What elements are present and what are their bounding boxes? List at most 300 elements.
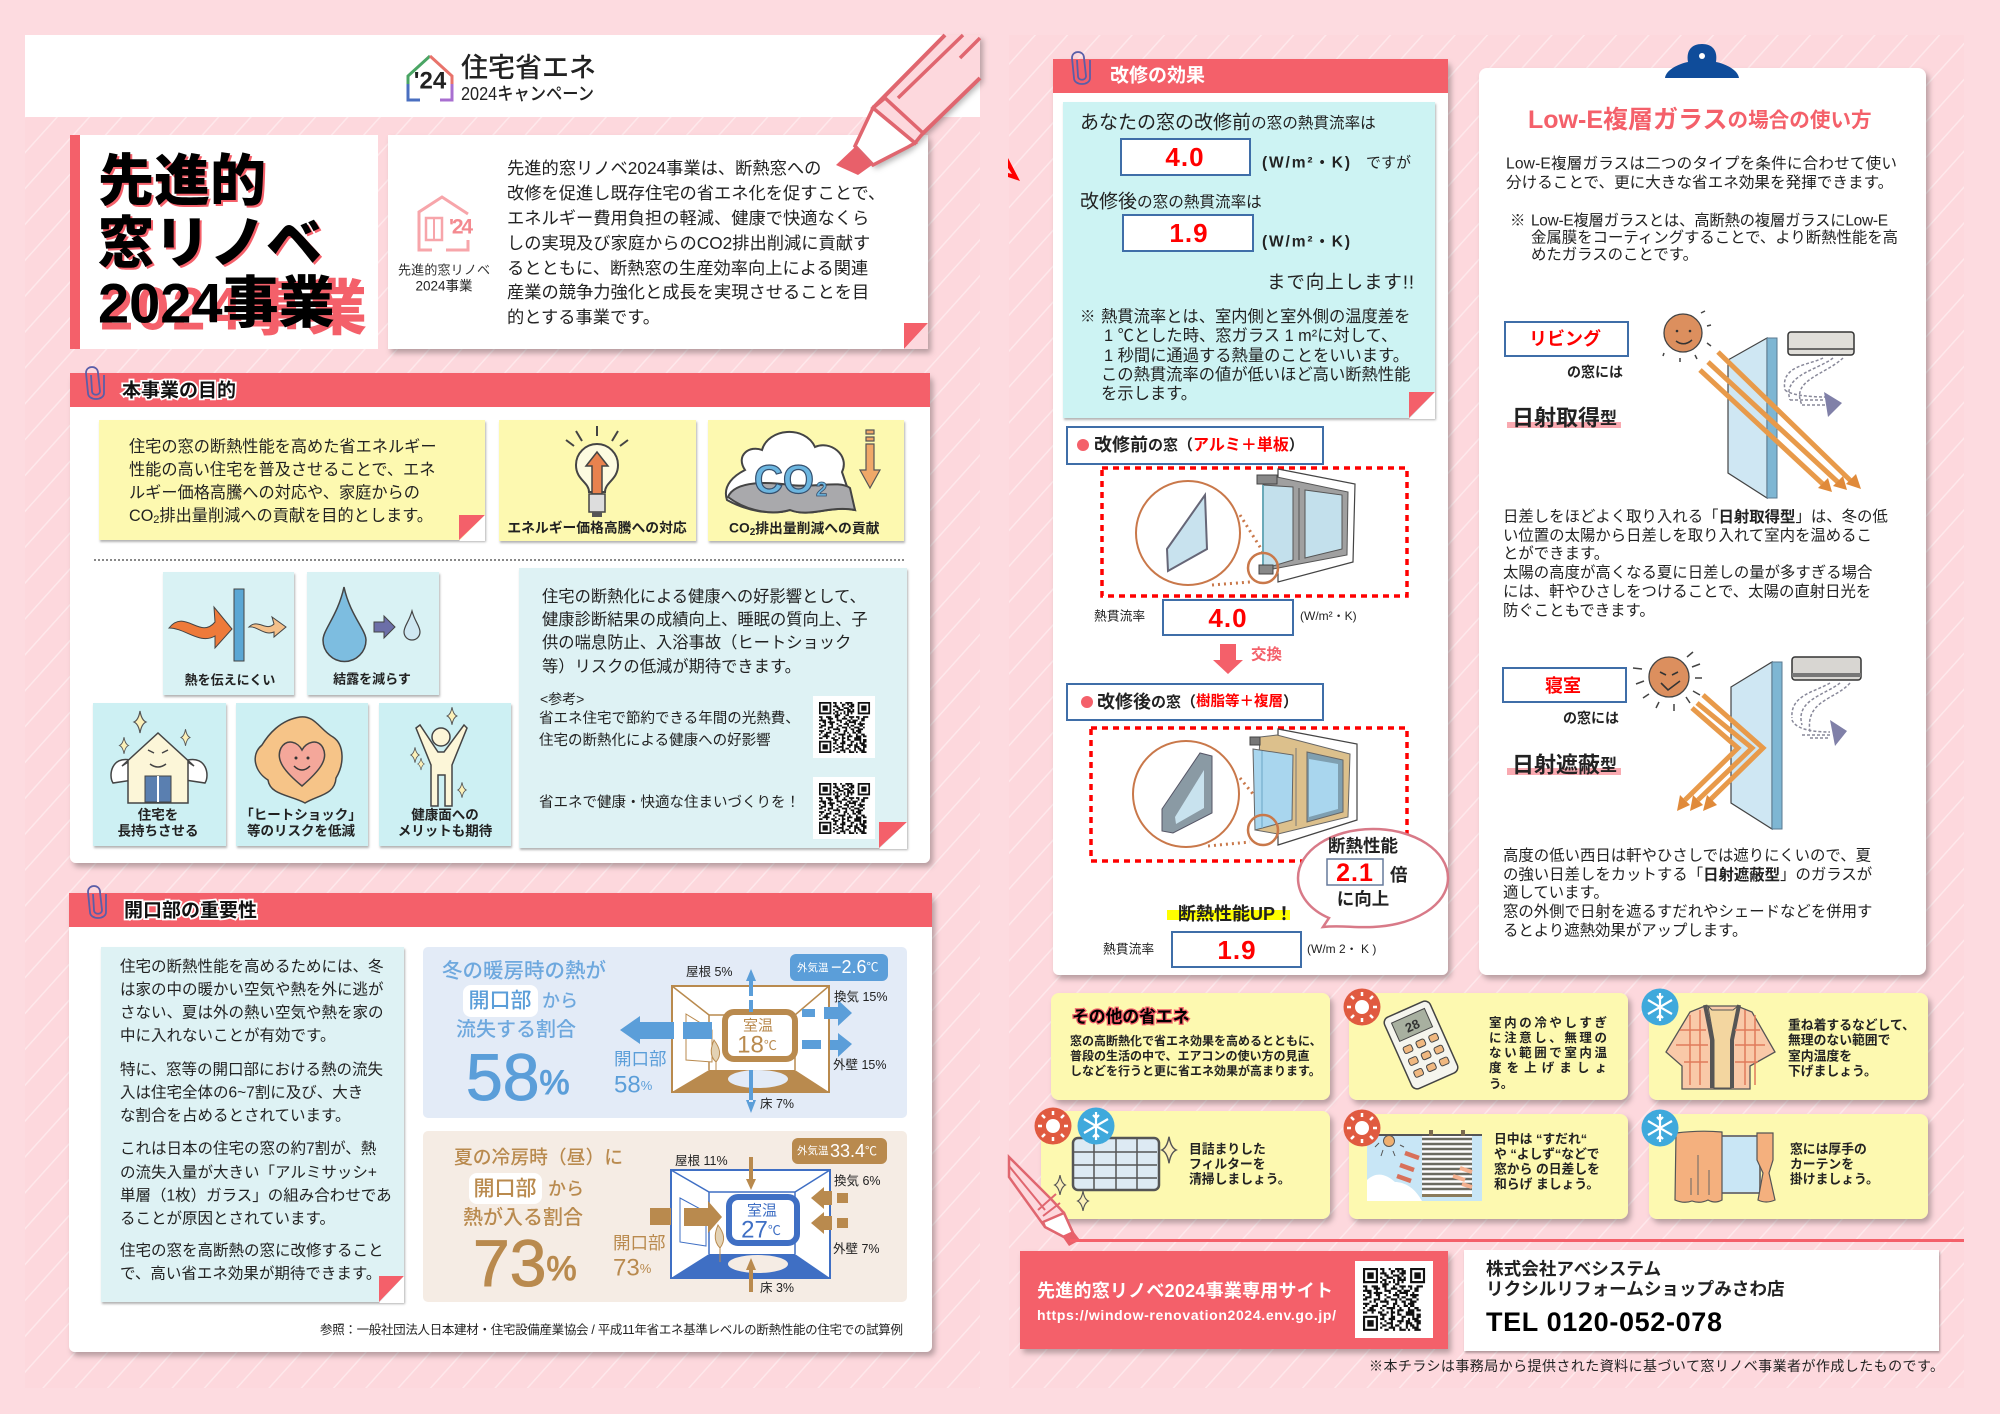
- tile text: しなどを行うと更に省エネ効果が高まります。: [1070, 1063, 1321, 1078]
- before U-value: [1094, 600, 1357, 635]
- tile label: [240, 808, 362, 838]
- arrows: [650, 1157, 848, 1292]
- room label: living: リビング: [1529, 328, 1601, 349]
- tile text: [1489, 1015, 1607, 1091]
- winter labels: 外壁 15%: [833, 1058, 886, 1072]
- unit: (W/m²・K): [1262, 234, 1350, 250]
- solar gain description: 太陽の高度が高くなる夏に日差しの量が多すぎる場合: [1503, 564, 1872, 582]
- blue note text: 住宅の断熱性能を高めるためには、冬: [120, 958, 384, 976]
- sun: [1663, 311, 1711, 362]
- tile text: 日中は “すだれ“: [1494, 1132, 1587, 1146]
- blue note text: 住宅の窓を高断熱の窓に改修すること: [120, 1242, 384, 1260]
- icon: heat against glass: [169, 589, 286, 661]
- explanation note: 1 秒間に通過する熱量のことをいいます。: [1104, 347, 1409, 365]
- title text: 2024事業: [98, 272, 335, 334]
- tile text: [1494, 1132, 1600, 1192]
- tile text: 普段の生活の中で、エアコンの使い方の見直: [1070, 1048, 1310, 1063]
- icon: hanten jacket: [1666, 1005, 1775, 1089]
- blue note: U-value explanation: あなたの窓の改修前の窓の熱貫流率は: [1080, 112, 1376, 134]
- tile text: 窓から の日差しを: [1494, 1162, 1600, 1176]
- intro text: [1506, 154, 1897, 192]
- summer labels: [675, 1154, 881, 1295]
- title text: [98, 150, 367, 342]
- winter heading: から: [542, 991, 578, 1011]
- intro card: [388, 135, 928, 349]
- tile: heat shock risk: [236, 703, 368, 846]
- winter labels: 屋根 5%: [686, 965, 733, 979]
- intro text: 産業の競争力強化と成長を実現させることを目: [507, 282, 869, 302]
- icon: remote control: 28: [1403, 1016, 1422, 1036]
- solar shading description: 高度の低い西日は軒やひさしでは遮りにくいので、夏: [1503, 846, 1871, 864]
- panel: summer heat gain: [423, 1131, 907, 1302]
- tile text: [1070, 1033, 1322, 1078]
- tile text: カーテンを: [1790, 1156, 1854, 1172]
- winter heading: 冬の暖房時の熱が: [442, 960, 606, 982]
- intro text: しの実現及び家庭からのCO2排出削減に貢献す: [507, 233, 870, 253]
- yellow note: 住宅の窓の断熱性能を高めた省エネルギー: [129, 438, 437, 456]
- summer room diagram: [650, 1157, 848, 1292]
- reference text: 住宅の断熱化による健康への好影響: [539, 732, 771, 749]
- footnote: ※本チラシは事務局から提供された資料に基づいて窓リノベ事業者が作成したものです。: [1369, 1358, 1944, 1374]
- tile label: メリットも期待: [398, 822, 493, 838]
- tile text: 重ね着するなどして、: [1788, 1018, 1915, 1032]
- room label: bedroom: の窓には: [1563, 710, 1619, 726]
- exchange arrow: 交換: [1251, 646, 1283, 664]
- icon: paper clip: [88, 886, 106, 918]
- panel: renovation effect: [1053, 52, 1448, 975]
- room label: bedroom: 寝室: [1545, 676, 1581, 696]
- tile text: [1189, 1142, 1291, 1186]
- solar shading description: [1503, 846, 1872, 940]
- tile text: 無理のない範囲で: [1788, 1032, 1890, 1048]
- after U-value: 熱貫流率: [1103, 942, 1154, 956]
- section heading: 改修の効果: [1110, 64, 1205, 86]
- reference text: <参考>: [540, 691, 584, 707]
- title text: 窓リノベ: [98, 212, 322, 274]
- solar gain description: には、軒やひさしをつけることで、太陽の直射日光を: [1503, 582, 1871, 600]
- tile: CO2 reduction: [708, 420, 904, 541]
- before-window illustration: [1102, 468, 1407, 596]
- value box after: 1.9: [1169, 218, 1209, 248]
- winter opening label: 開口部: [614, 1049, 666, 1069]
- room temperature label: [729, 1197, 797, 1244]
- reference text: [539, 691, 800, 811]
- divider: [94, 559, 906, 561]
- winter heading: 流失する割合: [456, 1018, 576, 1041]
- winter heading: [442, 960, 606, 1041]
- explanation note: 熱貫流率とは、室内側と室外側の温度差を: [1101, 308, 1410, 326]
- after U-value: (W/m 2・ K ): [1307, 942, 1376, 956]
- icon: remote control: [1382, 999, 1460, 1091]
- company name: リクシルリフォームショップみさわ店: [1486, 1279, 1785, 1299]
- summer opening label: [613, 1233, 666, 1282]
- tile text: 室内温度を: [1788, 1048, 1852, 1064]
- air conditioner: [1788, 332, 1854, 355]
- blue note: health benefits: 等）リスクの低減が期待できます。: [542, 658, 801, 676]
- before U-value: 4.0: [1208, 603, 1248, 633]
- air conditioner: [1792, 657, 1861, 680]
- icon: water drops: [323, 587, 420, 662]
- title text: 窓リノベ: [100, 214, 324, 276]
- blue note text: な割合を占めるとされています。: [120, 1106, 350, 1124]
- icon: clipboard clip: [1665, 44, 1739, 78]
- summer big number: %: [546, 1250, 577, 1288]
- magnified single glass: [1136, 481, 1240, 585]
- icon: happy person: [411, 707, 467, 806]
- tile: other energy savings: [1051, 993, 1330, 1100]
- blue note text: の流失入量が大きい「アルミサッシ+: [120, 1164, 377, 1182]
- explanation note: 1 ℃とした時、窓ガラス 1 m²に対して、: [1104, 327, 1397, 345]
- outdoor temperature badge winter: [790, 954, 888, 981]
- tile text: フィルターを: [1189, 1156, 1266, 1172]
- tile heading: その他の省エネ: [1072, 1008, 1190, 1026]
- tile text: 掛けましょう。: [1790, 1172, 1879, 1186]
- blue note text: は家の中の暖かい空気や熱を外に逃が: [120, 980, 384, 998]
- panel title: Low-E複層ガラスの場合の使い方: [1528, 106, 1872, 134]
- tile: curtain tip: [1642, 1110, 1928, 1219]
- tile text: に注意し、無理の: [1489, 1030, 1607, 1045]
- before U-value: (W/m²・K): [1300, 609, 1357, 623]
- solar shading description: 窓の外側で日射を遮るすだれやシェードなどを併用す: [1503, 902, 1872, 920]
- yellow note: ルギー価格高騰への対応や、家庭からの: [129, 484, 420, 502]
- blue note text: ることが原因とされています。: [120, 1210, 335, 1228]
- Low-E explanation: ※: [1510, 212, 1525, 230]
- after U-value: [1103, 932, 1376, 967]
- illustration: solar gain window: [1663, 311, 1861, 498]
- summer labels: 床 3%: [760, 1281, 794, 1295]
- divider line: [1070, 1239, 1964, 1242]
- tile label: 結露を減らす: [333, 672, 411, 686]
- icon: air filter: [1055, 1137, 1176, 1211]
- tile label: 2: [750, 526, 756, 538]
- panel: importance of openings: [69, 886, 932, 1352]
- section header bar: [69, 893, 932, 927]
- icon: summer badge: [1344, 988, 1380, 1026]
- intro text: 的とする事業です。: [507, 307, 660, 327]
- tile text: 目詰まりした: [1189, 1142, 1266, 1156]
- icon: campaign house logo: [408, 56, 452, 100]
- intro text: るとともに、断熱窓の生産効率向上による関連: [507, 258, 868, 278]
- icon: summer badge: [1344, 1110, 1380, 1146]
- title card: [70, 135, 378, 349]
- winter big number: 58: [466, 1040, 539, 1114]
- blue note text: 中に入れないことが有効です。: [120, 1026, 335, 1044]
- window drawing: [1257, 469, 1355, 582]
- room temperature label: 18℃: [737, 1032, 777, 1058]
- icon: paper clip: [1072, 52, 1090, 84]
- site URL: https://window-renovation2024.env.go.jp/: [1037, 1307, 1336, 1323]
- pen illustration top: [836, 35, 980, 175]
- title text: 先進的: [98, 150, 266, 212]
- callout: performance 2.1x: 倍: [1390, 865, 1408, 885]
- blue note: U-value explanation: 改修後の窓の熱貫流率は: [1080, 190, 1262, 212]
- room temperature label: 室温: [743, 1018, 773, 1034]
- type heading: solar shading: 日射遮蔽型: [1512, 752, 1617, 778]
- icon: project house logo: [419, 197, 468, 250]
- blue note: U-value explanation: まで向上します!!: [1267, 272, 1414, 292]
- before U-value: 熱貫流率: [1094, 608, 1145, 624]
- project logo label line 2: 2024事業: [415, 278, 473, 294]
- tile label: エネルギー価格高騰への対応: [507, 520, 687, 536]
- room temperature label: [725, 1012, 795, 1059]
- intro text: 分けることで、更に大きな省エネ効果を発揮できます。: [1506, 174, 1893, 192]
- QR code: [813, 777, 875, 839]
- icon: paper clip: [86, 367, 104, 399]
- title text: 先進的: [100, 152, 268, 214]
- tile: poor heat conduction: [163, 572, 294, 695]
- outdoor temperature badge winter: 外気温: [797, 961, 829, 974]
- tile text: 和らげ ましょう。: [1494, 1176, 1599, 1192]
- explanation note: ※: [1080, 308, 1095, 326]
- tile text: [1788, 1018, 1915, 1078]
- section heading: 開口部の重要性: [124, 900, 257, 922]
- tile: filter cleaning tip: [1034, 1108, 1330, 1219]
- winter opening label: [614, 1049, 666, 1098]
- icon: summer badge: [1034, 1108, 1072, 1144]
- intro text: [507, 158, 885, 327]
- value box before: 4.0: [1165, 142, 1205, 172]
- yellow note: [99, 420, 485, 541]
- tile text: 清掃しましょう。: [1189, 1172, 1291, 1186]
- icon: smiling heart: [255, 717, 342, 803]
- tile label: 住宅を: [138, 806, 178, 822]
- tile: layered clothing tip: [1642, 988, 1928, 1100]
- room label: bedroom: [1503, 668, 1626, 726]
- winter labels: 換気 15%: [834, 989, 888, 1004]
- tile: thermostat tip: [1344, 988, 1628, 1100]
- summer opening label: 開口部: [613, 1233, 666, 1253]
- reference text: 省エネ住宅で節約できる年間の光熱費、: [539, 710, 800, 727]
- QR code: [1355, 1261, 1433, 1338]
- winter big number: %: [539, 1064, 570, 1102]
- panel: purpose of the project: [70, 367, 930, 863]
- blue note text: [101, 947, 404, 1303]
- logo title: 住宅省エネ: [461, 53, 596, 83]
- tile text: 窓には厚手の: [1790, 1142, 1867, 1156]
- solar shading description: の強い日差しをカットする「日射遮蔽型」のガラスが: [1503, 866, 1872, 884]
- icon: CO2 cloud: CO: [754, 458, 814, 502]
- contact card: [1464, 1250, 1939, 1351]
- summer heading: 夏の冷房時（昼）に: [454, 1146, 623, 1168]
- logo subtitle: 2024キャンペーン: [461, 84, 594, 104]
- summer heading: 開口部: [474, 1178, 536, 1200]
- panel: how to use Low-E glass: [1479, 44, 1926, 975]
- tile: less condensation: [307, 572, 439, 695]
- tile: health merits: [379, 703, 511, 846]
- winter heading: 開口部: [468, 990, 532, 1012]
- magnified double glass: [1133, 741, 1239, 847]
- blue note: health benefits: 供の喘息防止、入浴事故（ヒートショック: [542, 634, 851, 652]
- summer heading: から: [548, 1179, 584, 1199]
- room label: living: [1505, 322, 1628, 380]
- summer labels: 外壁 7%: [833, 1242, 880, 1256]
- tile label: 排出量削減への貢献: [755, 520, 880, 536]
- icon: down arrow: [860, 430, 880, 488]
- banner: dedicated website: [1020, 1251, 1448, 1349]
- tile label: 健康面への: [411, 806, 479, 822]
- Low-E explanation: [1510, 212, 1898, 264]
- illustration: solar shading window: [1633, 652, 1861, 829]
- solar rays: [1685, 695, 1763, 800]
- unit: (W/m²・K): [1262, 154, 1350, 172]
- outdoor temperature badge summer: [792, 1138, 887, 1164]
- value box before: [1121, 139, 1250, 175]
- explanation note: を示します。: [1101, 385, 1197, 403]
- room temperature label: 室温: [747, 1202, 777, 1220]
- intro text: 先進的窓リノベ2024事業は、断熱窓への: [507, 158, 821, 178]
- QR code: [813, 696, 875, 758]
- summer opening label: 73%: [613, 1254, 652, 1282]
- logo mark text: '24: [414, 68, 447, 94]
- telephone: TEL 0120-052-078: [1486, 1307, 1722, 1337]
- panel: winter heat loss: [423, 947, 907, 1118]
- outdoor temperature badge summer: 33.4℃: [830, 1141, 877, 1161]
- tile text: や “よしず“などで: [1494, 1146, 1599, 1162]
- section heading: 本事業の目的: [122, 380, 236, 402]
- winter room diagram: [620, 969, 852, 1113]
- explanation note: [1080, 308, 1410, 403]
- tile: shade tip: [1344, 1110, 1628, 1219]
- project logo label: 先進的窓リノベ: [398, 262, 490, 278]
- icon mark text: '24: [449, 216, 473, 238]
- intro text: 改修を促進し既存住宅の省エネ化を促すことで、: [507, 183, 885, 203]
- tile label: 「ヒートショック」: [240, 808, 362, 822]
- tile: energy price: [499, 420, 696, 541]
- callout: performance 2.1x: に向上: [1337, 889, 1389, 909]
- outdoor temperature badge summer: 外気温: [797, 1144, 829, 1157]
- solar gain description: [1503, 508, 1888, 620]
- yellow note: 2: [153, 514, 159, 526]
- header band with campaign logo: [25, 35, 980, 117]
- blue note text: さない、夏は外の熱い空気や熱を家の: [120, 1004, 384, 1022]
- icon: strong house: [111, 711, 207, 803]
- outdoor temperature badge winter: −2.6℃: [831, 957, 879, 977]
- solar gain description: 日差しをほどよく取り入れる「日射取得型」は、冬の低: [1503, 508, 1888, 526]
- summer heading: [454, 1146, 623, 1229]
- blue note: U-value explanation: ですが: [1366, 154, 1411, 172]
- yellow note: 排出量削減への貢献を目的とします。: [159, 507, 433, 525]
- after U-value: 1.9: [1217, 935, 1257, 965]
- room label: living: の窓には: [1567, 364, 1623, 380]
- tile label: [398, 806, 493, 838]
- callout: performance 2.1x: 断熱性能: [1328, 836, 1398, 856]
- solar gain description: 防ぐこともできます。: [1503, 602, 1655, 620]
- room temperature label: 27℃: [741, 1216, 781, 1244]
- intro text: エネルギー費用負担の軽減、健康で快適なくら: [507, 208, 869, 228]
- yellow note: CO: [129, 507, 153, 525]
- blue note: health benefits: [519, 568, 907, 849]
- tile text: 窓の高断熱化で省エネ効果を高めるとともに、: [1070, 1033, 1322, 1048]
- tile text: [1790, 1142, 1879, 1186]
- sun: [1633, 652, 1702, 711]
- tile label: 長持ちさせる: [118, 822, 198, 838]
- explanation note: この熱貫流率の値が低いほど高い断熱性能: [1101, 366, 1410, 384]
- pen illustration bottom: [1009, 1157, 1080, 1246]
- tile label: 熱を伝えにくい: [185, 672, 275, 688]
- tile text: ない範囲で室内温: [1489, 1045, 1607, 1060]
- summer big number: 73: [473, 1226, 546, 1300]
- company name: 株式会社アベシステム: [1486, 1259, 1661, 1279]
- before-window heading: 改修前の窓（アルミ＋単板）: [1094, 434, 1304, 455]
- summer labels: 屋根 11%: [675, 1154, 728, 1168]
- winter labels: [686, 965, 888, 1111]
- intro text: Low-E複層ガラスは二つのタイプを条件に合わせて使い: [1506, 154, 1897, 172]
- winter labels: 床 7%: [760, 1097, 794, 1111]
- icon: light bulb: [566, 426, 628, 517]
- tile label: 等のリスクを低減: [247, 822, 355, 838]
- solar gain description: とができます。: [1503, 544, 1609, 562]
- solar gain description: い位置の太陽から日差しを取り入れて室内を温めるこ: [1503, 526, 1872, 544]
- summer heading: 熱が入る割合: [463, 1206, 583, 1229]
- callout: performance 2.1x: 2.1: [1336, 859, 1374, 887]
- callout: performance 2.1x: [1298, 829, 1448, 927]
- before-window heading: [1067, 427, 1323, 464]
- arrows: [620, 969, 852, 1113]
- reference text: 省エネで健康・快適な住まいづくりを！: [539, 794, 800, 811]
- summer labels: 換気 6%: [834, 1173, 881, 1188]
- performance up label: 断熱性能UP！: [1178, 904, 1293, 924]
- blue note: health benefits: 健康診断結果の成績向上、睡眠の質向上、子: [542, 611, 868, 629]
- tile text: 室内の冷やしすぎ: [1489, 1015, 1607, 1030]
- small red mark: [1008, 158, 1020, 181]
- Low-E explanation: 金属膜をコーティングすることで、より断熱性能を高: [1531, 228, 1898, 246]
- after-window heading: [1067, 684, 1323, 720]
- section header bar: [70, 373, 930, 407]
- blue note: health benefits: 住宅の断熱化による健康への好影響として、: [542, 588, 866, 606]
- company name: [1486, 1259, 1785, 1299]
- blue note text: 特に、窓等の開口部における熱の流失: [120, 1060, 384, 1078]
- solar shading description: るとより遮熱効果がアップします。: [1503, 922, 1747, 940]
- type heading: solar gain: 日射取得型: [1512, 406, 1617, 430]
- icon: bamboo blind: [1367, 1130, 1482, 1201]
- window drawing: [1250, 729, 1357, 845]
- section header bar: [1053, 59, 1448, 93]
- solar rays: [1700, 352, 1854, 487]
- winter opening label: 58%: [614, 1072, 653, 1098]
- blue note text: で、高い省エネ効果が期待できます。: [120, 1264, 381, 1282]
- tile text: 度を上げましょ: [1489, 1060, 1607, 1075]
- tile text: 下げましょう。: [1788, 1064, 1877, 1078]
- after-window illustration: [1091, 728, 1407, 861]
- solar shading description: 適しています。: [1503, 884, 1609, 902]
- site name: 先進的窓リノベ2024事業専用サイト: [1037, 1281, 1333, 1301]
- blue note text: これは日本の住宅の窓の約7割が、熱: [120, 1140, 377, 1158]
- tile: longer life house: [93, 703, 226, 846]
- icon: winter badge: [1078, 1108, 1114, 1144]
- left page striped background: [25, 35, 980, 1388]
- title text: 2024事業: [100, 276, 367, 342]
- icon: CO2 cloud: [726, 432, 855, 513]
- icon: CO2 cloud: 2: [816, 479, 827, 501]
- tile label: [118, 806, 198, 838]
- tile label: CO: [729, 520, 750, 536]
- after-window heading: 改修後の窓（樹脂等＋複層）: [1097, 692, 1298, 712]
- tile text: う。: [1489, 1077, 1513, 1091]
- icon: winter badge: [1642, 1110, 1678, 1146]
- exchange arrow: [1213, 644, 1283, 674]
- blue note: U-value explanation: [1063, 102, 1435, 419]
- source note: 参照：一般社団法人日本建材・住宅設備産業協会 / 平成11年省エネ基準レベルの断熱性能の住宅での試算例: [320, 1322, 903, 1337]
- icon: winter badge: [1642, 988, 1678, 1026]
- Low-E explanation: めたガラスのことです。: [1531, 246, 1698, 264]
- value box after: [1123, 215, 1253, 251]
- icon: curtains: [1675, 1131, 1775, 1202]
- Low-E explanation: Low-E複層ガラスとは、高断熱の複層ガラスにLow-E: [1531, 212, 1888, 230]
- right page striped background: [1009, 35, 1964, 1388]
- yellow note: 性能の高い住宅を普及させることで、エネ: [129, 461, 435, 479]
- blue note text: 単層（1枚）ガラス」の組み合わせであ: [120, 1186, 392, 1204]
- blue note text: 入は住宅全体の6~7割に及び、大き: [120, 1084, 363, 1102]
